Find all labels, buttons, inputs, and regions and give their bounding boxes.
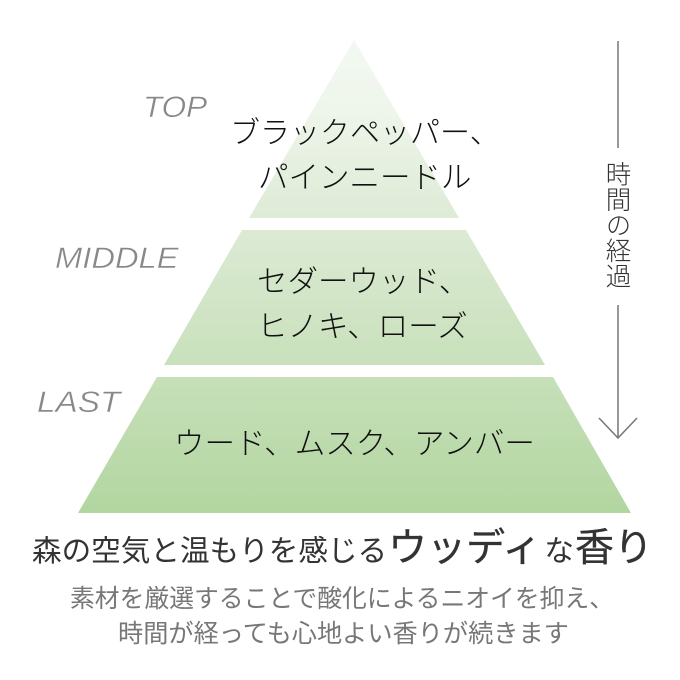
middle notes line 1: セダーウッド、 xyxy=(257,257,469,301)
headline: 森の空気と温もりを感じるウッディな香り xyxy=(32,517,653,573)
pyramid tier: top xyxy=(249,40,459,218)
top notes line 1: ブラックペッパー、 xyxy=(230,108,500,152)
description line 2: 時間が経っても心地よい香りが続きます xyxy=(118,614,569,650)
label: TOP: TOP xyxy=(143,91,207,124)
pyramid tier: last xyxy=(78,377,631,513)
top notes line 2: パインニードル xyxy=(258,153,472,197)
arrow label: passage of time: 時間の経過 xyxy=(600,161,637,288)
label: MIDDLE: MIDDLE xyxy=(55,242,179,275)
description line 1: 素材を厳選することで酸化によるニオイを抑え、 xyxy=(70,579,614,615)
middle notes line 2: ヒノキ、ローズ xyxy=(257,302,468,346)
pyramid tier: middle xyxy=(164,230,545,365)
last notes: ウード、ムスク、アンバー xyxy=(174,419,535,463)
label: LAST: LAST xyxy=(37,386,120,419)
